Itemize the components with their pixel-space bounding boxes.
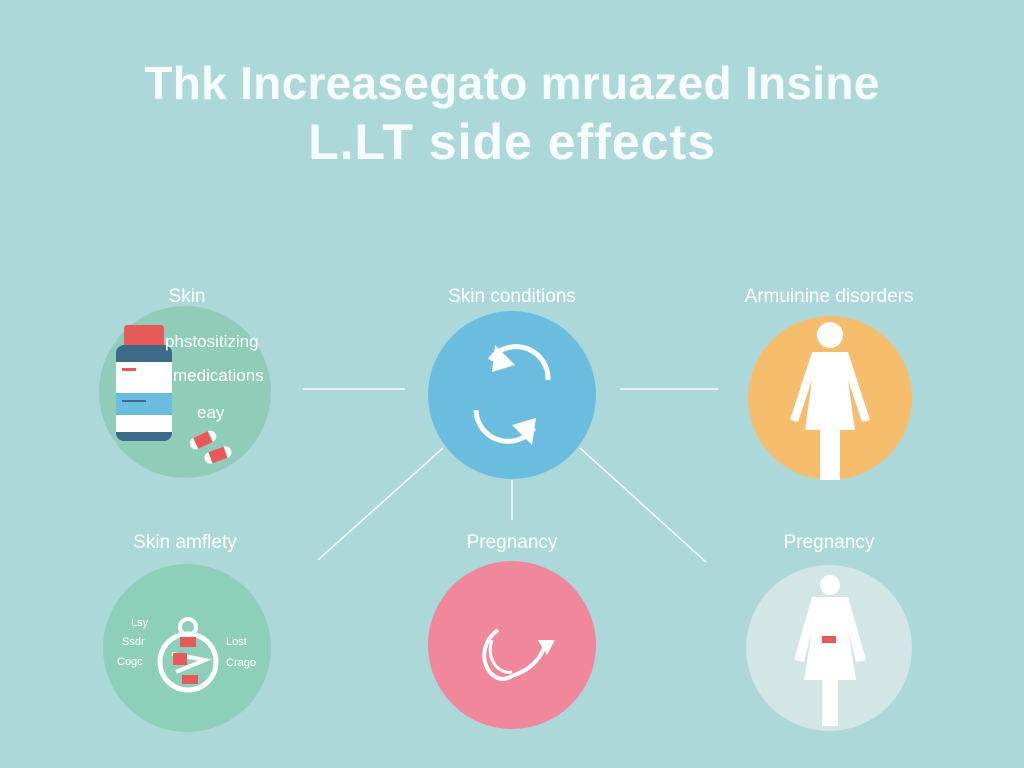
panel: skin medications: eay: [197, 403, 225, 422]
title: Thk Increasegato mruazed Insine: [144, 57, 880, 109]
panel: skin amflety icon: Lsy: [131, 617, 149, 629]
panel: skin amflety icon: Ssdr: [122, 636, 145, 648]
panel: skin medications: [99, 306, 271, 478]
title: [144, 57, 880, 170]
panel: skin amflety icon: Cogc: [117, 656, 143, 668]
panel: pregnancy right icon: [746, 565, 912, 731]
panel: autoimmune icon: [748, 316, 912, 480]
panel: skin amflety icon: [103, 564, 271, 732]
panel: skin conditions icon: [428, 311, 596, 479]
panel: skin medications: phstositizing: [165, 332, 259, 351]
label: autoimmune disorders: Armuinine disorders: [745, 286, 913, 307]
panel: skin medications: medications: [173, 366, 264, 385]
panel: skin amflety icon: Crago: [226, 657, 256, 669]
panel: pregnancy center icon: [428, 561, 596, 729]
label: skin conditions: Skin conditions: [448, 286, 576, 307]
title: L.LT side effects: [308, 114, 716, 170]
label: pregnancy center: Pregnancy: [467, 532, 557, 553]
label: pregnancy right: Pregnancy: [784, 532, 874, 553]
label: skin: Skin: [169, 286, 205, 307]
panel: skin amflety icon: Lost: [226, 636, 247, 648]
label: skin amflety: Skin amflety: [133, 532, 237, 553]
